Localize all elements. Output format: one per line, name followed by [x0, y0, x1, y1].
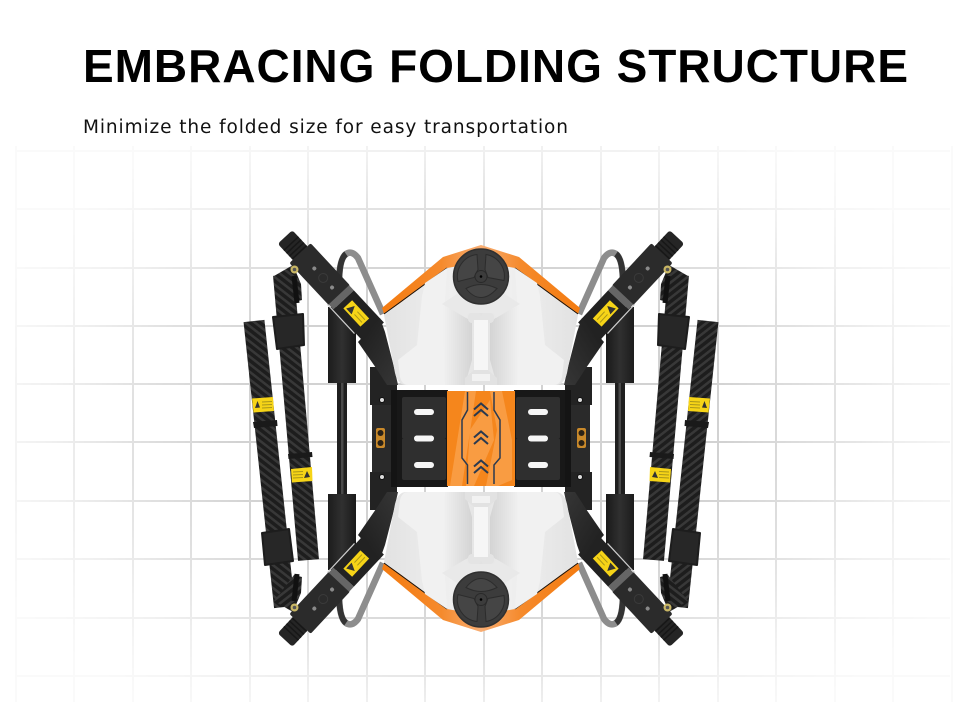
frame corner: [370, 367, 448, 439]
tank inner panel: [441, 305, 472, 385]
neck pad top: [468, 313, 481, 323]
neck pad bottom: [465, 370, 481, 385]
cover circuit lines: [462, 392, 500, 484]
motor rod: [337, 383, 347, 439]
grey band: [329, 285, 354, 309]
inner tube clamp ring: [288, 452, 312, 459]
bottom-left quadrant: [274, 436, 481, 650]
top-left quadrant: arm, motor and tank half: [274, 227, 481, 442]
centre orange cover: [447, 391, 515, 486]
left folded carbon tubes: [252, 275, 312, 607]
frame screw: [380, 398, 384, 402]
ribbed nozzle: [278, 230, 309, 261]
arm clamp: [358, 318, 398, 385]
white tank half: [384, 262, 481, 385]
arm body: [289, 243, 350, 305]
outer tube warning sticker: [252, 397, 274, 412]
cap grips: [457, 254, 504, 298]
right connector plug: [577, 428, 586, 448]
orange tank shell: [382, 245, 481, 314]
cap body: [454, 249, 508, 304]
outer carbon tube: [254, 321, 284, 607]
inner tube collar: [273, 314, 304, 349]
hinge spring: [294, 276, 297, 303]
arm warning sticker: [343, 300, 369, 327]
folded landing hoop: [339, 253, 383, 314]
hinge pin: [290, 266, 298, 274]
left connector plug: [376, 428, 385, 448]
cover chevrons: [474, 404, 488, 473]
tank cap top: [454, 249, 508, 304]
inner carbon tube: [284, 275, 308, 560]
arm sleeve: [333, 290, 384, 342]
bottom-right quadrant: [481, 436, 688, 650]
neck foot highlight: [472, 374, 481, 381]
battery plate: [397, 390, 447, 442]
screws: [310, 264, 337, 292]
outer tube clamp ring: [253, 420, 278, 428]
cap platform: [442, 292, 481, 318]
power connector: [372, 405, 391, 439]
tank cap bottom: [454, 572, 508, 627]
tube elbow: [274, 265, 302, 302]
neck: [474, 320, 481, 374]
tank side facet: [398, 268, 447, 385]
cover light facets: [450, 391, 512, 486]
outer tube collar: [262, 529, 293, 565]
title: EMBRACING FOLDING STRUCTURE: [83, 40, 908, 92]
subtitle: Minimize the folded size for easy transportation: [83, 117, 568, 138]
inner tube warning sticker: [291, 467, 312, 482]
silver edge: [327, 304, 355, 334]
tank seam: [384, 268, 447, 314]
drone illustration: [252, 227, 710, 650]
cap centre: [475, 270, 487, 282]
folding arm: [274, 227, 384, 342]
right folded carbon tubes: [650, 275, 710, 607]
motor cylinder: [328, 307, 356, 383]
side rail shade: [391, 390, 397, 439]
top-right quadrant: [481, 227, 688, 442]
background grid: [16, 146, 952, 702]
